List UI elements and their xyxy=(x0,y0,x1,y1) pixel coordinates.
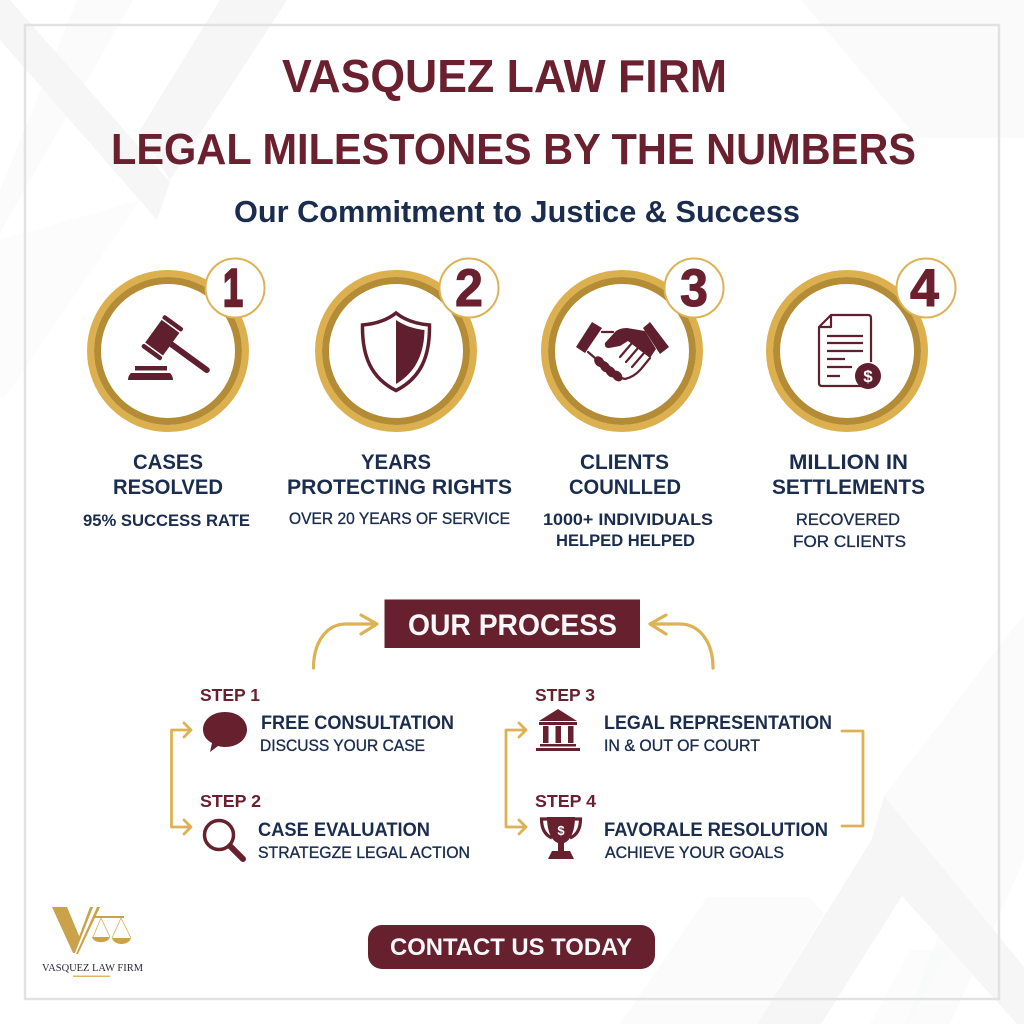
detail: recovered for clients: RECOVERED xyxy=(796,510,900,529)
step label 1: STEP 1 xyxy=(200,685,260,705)
number badge 3 xyxy=(664,258,724,318)
step label 2: STEP 2 xyxy=(200,791,261,811)
label: clients counseled xyxy=(569,450,681,499)
label: cases resolved xyxy=(113,450,223,499)
subtitle: Our Commitment to Justice & Success xyxy=(234,194,800,229)
detail: success rate: 95% SUCCESS RATE xyxy=(83,511,250,530)
detail: recovered for clients xyxy=(793,510,906,551)
panel: million in settlements xyxy=(770,258,956,551)
icon: shield in gold ring xyxy=(318,274,474,428)
icon: document with dollar in gold ring: $ xyxy=(863,367,873,386)
detail: recovered for clients: FOR CLIENTS xyxy=(793,532,906,551)
icon: V with scales xyxy=(52,907,131,954)
label: million in settlements: MILLION IN xyxy=(789,450,908,474)
panel: clients counseled xyxy=(543,258,724,550)
icon: courthouse xyxy=(536,709,580,751)
text: favorable resolution xyxy=(604,819,828,862)
number badge 1: 1 xyxy=(223,259,243,318)
label: cases resolved: CASES xyxy=(133,450,203,474)
icon: magnifier xyxy=(204,820,243,859)
step label 3: STEP 3 xyxy=(535,685,595,705)
title: VASQUEZ LAW FIRM xyxy=(282,50,727,102)
label: cases resolved: RESOLVED xyxy=(113,475,223,499)
arrow: right bracket xyxy=(842,731,863,826)
label: clients counseled: CLIENTS xyxy=(580,450,669,474)
arrow: steps 3 to 4 bracket xyxy=(506,723,526,834)
text: legal representation: LEGAL REPRESENTATION xyxy=(604,712,832,734)
number badge 4 xyxy=(896,258,956,318)
icon: trophy: $ xyxy=(557,823,565,838)
text: case evaluation: CASE EVALUATION xyxy=(258,819,430,841)
label: clients counseled: COUNLLED xyxy=(569,475,681,499)
label: years protecting rights xyxy=(287,450,512,499)
detail: individuals helped: HELPED HELPED xyxy=(556,531,695,550)
icon: gavel in gold ring xyxy=(90,274,246,428)
text: legal representation: IN & OUT OF COURT xyxy=(604,736,760,755)
icon: trophy xyxy=(542,817,580,859)
text: free consultation xyxy=(260,712,454,755)
title xyxy=(111,50,916,174)
label: million in settlements: SETTLEMENTS xyxy=(772,475,925,499)
wordmark: VASQUEZ LAW FIRM xyxy=(42,962,143,974)
icon: handshake in gold ring xyxy=(544,274,700,428)
logo xyxy=(42,907,143,977)
arrow: left curved xyxy=(314,615,377,668)
title: LEGAL MILESTONES BY THE NUMBERS xyxy=(111,125,916,174)
detail: years of service: OVER 20 YEARS OF SERVICE xyxy=(289,509,510,528)
detail: individuals helped: 1000+ INDIVIDUALS xyxy=(543,510,713,529)
arrow: steps 1 to 2 bracket xyxy=(172,723,191,834)
step 2 xyxy=(200,791,470,862)
text: free consultation: DISCUSS YOUR CASE xyxy=(260,736,425,755)
number badge 4: 4 xyxy=(910,259,940,318)
text: case evaluation xyxy=(258,819,470,862)
icon: speech bubble xyxy=(203,712,247,752)
number badge 1 xyxy=(206,258,264,318)
step 1 xyxy=(200,685,454,755)
number badge 3: 3 xyxy=(680,259,708,318)
button: contact us today: CONTACT US TODAY xyxy=(390,934,632,961)
text: favorable resolution: FAVORALE RESOLUTION xyxy=(604,819,828,841)
step label 4: STEP 4 xyxy=(535,791,596,811)
text: favorable resolution: ACHIEVE YOUR GOALS xyxy=(605,843,784,862)
label: million in settlements xyxy=(772,450,925,499)
label: years protecting rights: PROTECTING RIGHTS xyxy=(287,475,512,499)
number badge 2: 2 xyxy=(455,259,483,318)
panel: cases resolved xyxy=(83,258,264,530)
arrow: right curved xyxy=(650,615,713,668)
detail: individuals helped xyxy=(543,510,713,550)
step 4 xyxy=(535,791,828,862)
heading: our process: OUR PROCESS xyxy=(408,609,617,642)
step 3 xyxy=(535,685,832,755)
panel: years protecting rights xyxy=(287,258,512,528)
icon: document with dollar in gold ring xyxy=(770,274,924,428)
label: years protecting rights: YEARS xyxy=(361,450,431,474)
text: free consultation: FREE CONSULTATION xyxy=(261,712,454,734)
heading: our process xyxy=(384,600,640,648)
text: legal representation xyxy=(604,712,832,755)
number badge 2 xyxy=(440,258,498,318)
button: contact us today xyxy=(368,925,655,969)
text: case evaluation: STRATEGZE LEGAL ACTION xyxy=(258,843,470,862)
